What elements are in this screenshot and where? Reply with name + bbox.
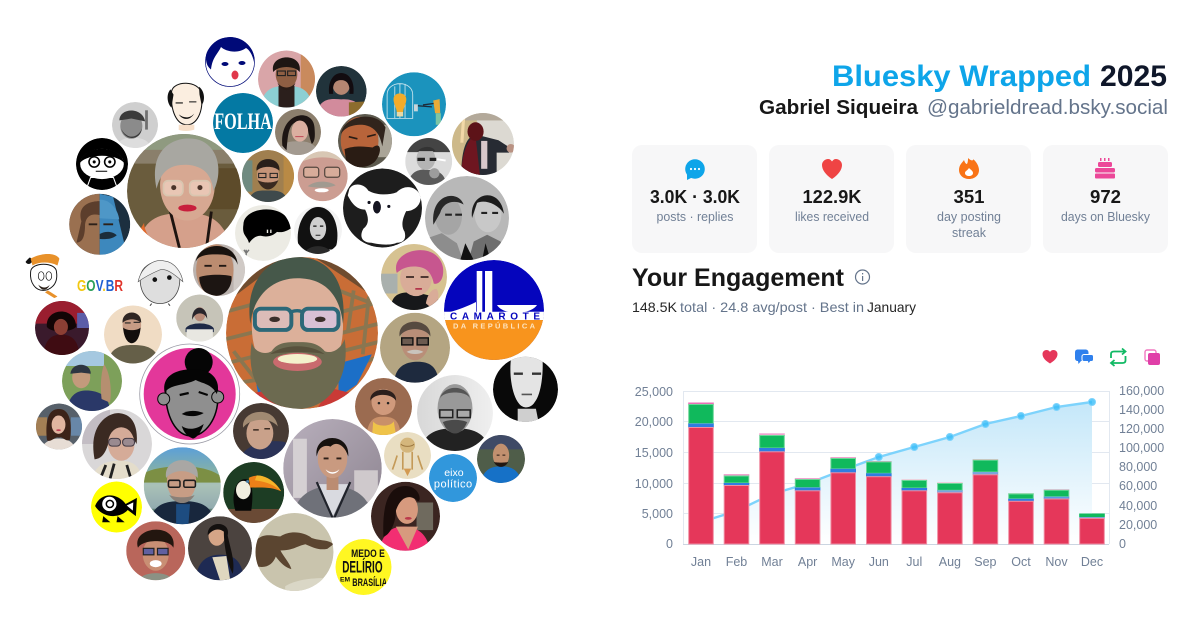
avatar: woman in front of bookshelf <box>36 404 82 450</box>
avatar: Medo e Delirio em Brasilia logo: DELÍRIO <box>342 558 383 577</box>
bar: Jul <box>902 479 927 544</box>
month labels: Jun <box>869 555 889 569</box>
left axis labels: 20,000 <box>635 415 673 429</box>
panel: days on Bluesky <box>1043 145 1168 253</box>
avatar: toucan <box>223 462 284 523</box>
avatar: woman with curly hair, monochrome <box>294 206 342 254</box>
month labels: Sep <box>974 555 997 569</box>
avatar: child in yellow tank top <box>355 378 412 435</box>
left axis labels <box>635 385 673 551</box>
avatar: Eixo Politico logo: eixo <box>444 467 464 479</box>
avatar: man in grey cardigan <box>283 419 382 518</box>
month labels: Jan <box>691 555 711 569</box>
right axis labels <box>1119 384 1164 551</box>
avatar: pink cartoon man with hair bun <box>140 344 240 444</box>
avatar: black hair cartoon on cream <box>235 205 291 261</box>
right axis labels: 80,000 <box>1119 460 1157 474</box>
left axis labels: 5,000 <box>642 507 673 521</box>
avatar: bearded man close-up <box>193 244 245 296</box>
panel: likes received: likes received <box>795 210 869 224</box>
avatar: laughing man with curly hair <box>126 521 185 580</box>
bar: Apr <box>795 478 820 544</box>
stacked bars <box>688 402 1105 544</box>
avatar: black and white cartoon with glasses <box>76 138 128 190</box>
avatar: Camarote da Republica logo <box>444 260 544 360</box>
bar: Aug <box>937 482 963 544</box>
month labels <box>691 555 1103 569</box>
icon: heart <box>822 159 842 179</box>
bar: Jan <box>688 402 714 544</box>
panel: posts and replies <box>632 145 757 253</box>
avatar: man with cap holding plant <box>62 351 122 411</box>
avatar: Folha logo <box>213 93 273 153</box>
avatar: girl in dark room <box>316 66 367 117</box>
panel: likes received: 122.9K <box>802 187 862 207</box>
month labels: Aug <box>939 555 961 569</box>
heading: Your Engagement: Your Engagement <box>632 264 845 292</box>
engagement summary: January <box>867 299 916 315</box>
avatar: Medo e Delirio em Brasilia logo <box>336 539 392 595</box>
avatar: man in cap, greyscale <box>112 102 158 148</box>
right axis labels: 40,000 <box>1119 499 1157 513</box>
avatar: koala <box>343 168 422 248</box>
icon: replies bubbles <box>1075 350 1094 364</box>
panel: day posting streak: streak <box>952 226 987 240</box>
avatar: split brown and blue portrait <box>69 194 130 255</box>
avatar: woman in blue blazer <box>188 516 252 580</box>
title: 2025 <box>1100 60 1167 93</box>
avatar: Medo e Delirio em Brasilia logo: MEDO E <box>351 548 385 560</box>
avatar: beige drawing <box>384 432 431 479</box>
avatar: man with glasses, pastel shirt <box>258 50 318 108</box>
month labels: May <box>831 555 856 569</box>
right axis labels: 60,000 <box>1119 479 1157 493</box>
cumulative area and line <box>701 398 1096 544</box>
avatar: tiger cartoon <box>26 254 60 298</box>
engagement summary: 148.5K <box>632 299 678 315</box>
bar: May <box>830 457 856 544</box>
bar: Dec <box>1079 514 1105 544</box>
icon: flame <box>959 158 979 179</box>
avatar: bearded man <box>338 114 392 168</box>
avatar: black and white woman <box>493 357 558 422</box>
avatar: woman in pink dress <box>371 482 440 551</box>
avatar: man with white hair by a lake <box>144 447 221 524</box>
month labels: Nov <box>1045 555 1068 569</box>
avatar: main profile photo, bearded man with teal glasses <box>226 257 378 409</box>
left axis labels: 25,000 <box>635 385 673 399</box>
panel: day posting streak: 351 <box>954 187 984 207</box>
right axis labels: 140,000 <box>1119 403 1164 417</box>
left axis labels: 15,000 <box>635 446 673 460</box>
avatar: two men black and white <box>425 176 509 260</box>
avatar: blue cartoon boy <box>206 37 254 86</box>
month labels: Jul <box>906 555 922 569</box>
user name and handle: Gabriel Siqueira <box>759 97 919 119</box>
panel: day posting streak <box>906 145 1031 253</box>
bar: Sep <box>973 459 998 544</box>
avatar: bald cartoon man <box>168 82 204 131</box>
chart legend <box>1042 348 1160 366</box>
avatar: blond man close-up <box>233 403 289 459</box>
panel: likes received <box>769 145 894 253</box>
engagement summary: total · 24.8 avg/post · Best in <box>680 299 864 315</box>
title: Bluesky Wrapped <box>832 60 1091 93</box>
avatar: Folha logo: FOLHA <box>214 110 272 135</box>
avatar bubble cluster <box>21 37 558 595</box>
bar: Nov <box>1044 489 1069 544</box>
avatar: woman with short grey hair <box>127 134 241 248</box>
right axis labels: 120,000 <box>1119 422 1164 436</box>
avatar: bird cage and light bulb <box>382 72 446 136</box>
avatar: woman with glasses and curly hair <box>82 409 152 479</box>
icon: likes heart <box>1042 350 1058 364</box>
bar: Oct <box>1008 493 1034 544</box>
avatar: grey cartoon girl <box>138 260 184 306</box>
panel: posts and replies: 3.0K · 3.0K <box>650 187 740 207</box>
avatar: bald man in blue jacket <box>477 435 525 483</box>
avatar: Eixo Politico logo <box>429 454 477 502</box>
right axis labels: 0 <box>1119 537 1126 551</box>
user name and handle <box>759 97 1168 119</box>
avatar: man with rectangular glasses and moustache <box>380 313 450 383</box>
avatar: man in red and dark light <box>35 301 89 355</box>
avatar: rock and lizard claw <box>256 513 334 591</box>
panel: days on Bluesky: 972 <box>1090 187 1121 207</box>
right axis labels: 160,000 <box>1119 384 1164 398</box>
engagement summary <box>632 299 916 315</box>
month labels: Dec <box>1081 555 1103 569</box>
avatar: Camarote da Republica logo: CAMAROTE <box>450 311 540 322</box>
month labels: Mar <box>761 555 783 569</box>
icon: chat bubble <box>685 159 705 180</box>
avatar: older man with moustache <box>298 151 348 201</box>
bar: Feb <box>724 474 749 544</box>
logo: GOV.BR: GOV.BR <box>77 278 123 295</box>
panel: day posting streak: day posting <box>937 210 1001 224</box>
user name and handle: @gabrieldread.bsky.social <box>927 97 1168 119</box>
panel: days on Bluesky: days on Bluesky <box>1061 210 1151 224</box>
avatar: grey man with sunglasses <box>405 138 452 185</box>
month labels: Apr <box>798 555 817 569</box>
avatar: Medo e Delirio em Brasilia logo: EM <box>340 577 350 584</box>
panel: posts and replies: posts · replies <box>656 210 734 224</box>
left axis labels: 0 <box>666 537 673 551</box>
avatar: bald bearded man in olive shirt <box>104 306 162 364</box>
avatar: man with glasses, bookshelf <box>242 150 294 202</box>
month labels: Oct <box>1011 555 1031 569</box>
bar: Jun <box>866 461 892 544</box>
right axis labels: 100,000 <box>1119 441 1164 455</box>
avatar: woman with dark curly hair <box>275 109 321 155</box>
icon: info <box>856 270 870 284</box>
right axis labels: 20,000 <box>1119 518 1157 532</box>
avatar: Camarote da Republica logo: DA REPÚBLICA <box>453 321 536 330</box>
icon: cake <box>1095 158 1115 178</box>
engagement combo chart <box>635 384 1164 569</box>
avatar: grey bald man illustration <box>417 375 493 451</box>
avatar: woman speaking at microphone <box>176 294 223 342</box>
icon: quotes squares <box>1145 350 1160 365</box>
avatar: yellow fish logo <box>91 482 142 532</box>
bar: Mar <box>759 433 785 544</box>
month labels: Feb <box>726 555 747 569</box>
avatar: pink haired woman <box>381 244 447 310</box>
icon: reposts arrows <box>1111 348 1126 366</box>
avatar: Eixo Politico logo: político <box>434 479 472 491</box>
avatar: Darth Vader with lightsaber <box>452 113 515 175</box>
avatar: Medo e Delirio em Brasilia logo: BRASÍLIA <box>352 576 387 589</box>
left axis labels: 10,000 <box>635 477 673 491</box>
